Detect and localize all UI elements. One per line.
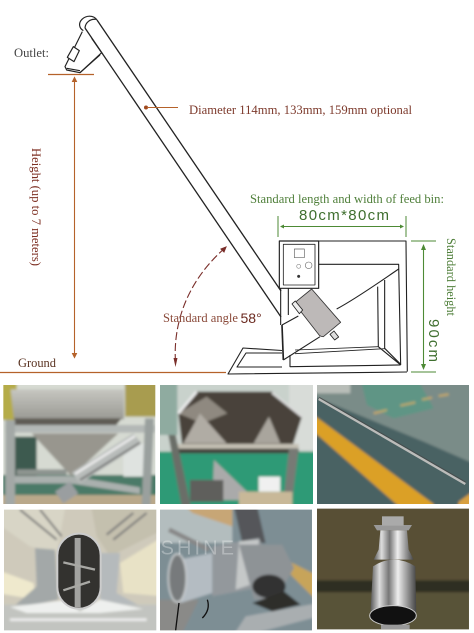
control box [279, 241, 319, 288]
photo: stainless discharge outlet [317, 508, 469, 630]
feed bin base frame [228, 348, 407, 374]
height label: Height (up to 7 meters) [29, 148, 43, 266]
ground line [0, 372, 226, 374]
hopper body [282, 269, 399, 360]
standard height label: Standard height [444, 238, 458, 317]
outlet label: Outlet: [14, 46, 49, 60]
width value: 80cm*80cm [299, 207, 389, 224]
ground label: Ground [18, 356, 57, 370]
outer frame [319, 241, 407, 372]
arrow: standard angle arc [174, 247, 226, 367]
arrow: bin width [278, 216, 406, 237]
diameter label: Diameter 114mm, 133mm, 159mm optional [189, 103, 413, 117]
motor [296, 289, 341, 337]
icon: conveyor outlet head [65, 16, 102, 73]
feed bin machine [279, 241, 407, 372]
height value: 90cm [425, 319, 442, 362]
feed bin label: Standard length and width of feed bin: [250, 192, 444, 206]
photo: screw auger on factory floor [317, 385, 469, 504]
photo: screw inside hopper outlet [4, 510, 156, 630]
photo: hopper from above with motor [160, 385, 313, 504]
conveyor tube [85, 20, 281, 317]
photo: hopper on frame, side view [3, 385, 156, 504]
standard angle label: Standard angle [163, 311, 238, 325]
outlet level line [48, 74, 94, 76]
panel: conveyor dimension diagram [0, 16, 458, 374]
arrow: bin height [411, 241, 436, 372]
angle value: 58° [240, 310, 262, 326]
watermark text: SHINE [161, 538, 234, 560]
photo: gear motor [160, 510, 312, 630]
diameter leader [144, 106, 178, 110]
arrow: height [72, 77, 77, 358]
